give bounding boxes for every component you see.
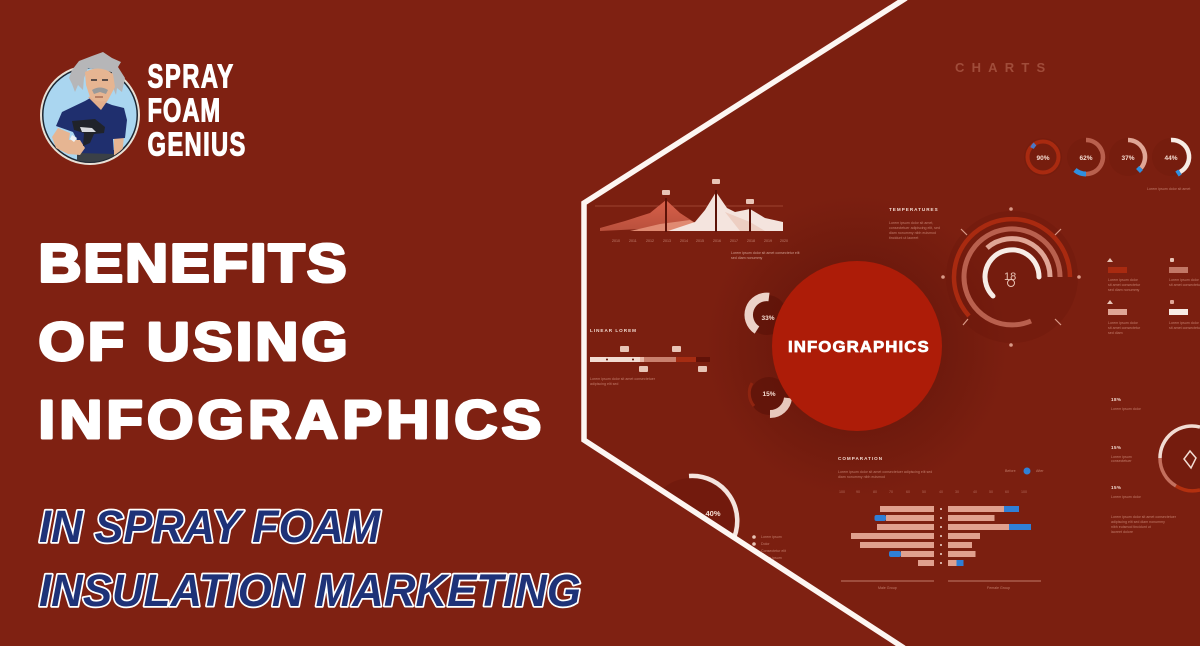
- chart: area peaks: 2016: [713, 239, 721, 243]
- text block: temperatures: tincidunt ut laoreet: [889, 236, 918, 240]
- chart: comparison bars: diam nonummy nibh euismod: [838, 475, 885, 479]
- chart: four percentage donuts: 44%: [1164, 155, 1178, 162]
- legend blocks: A B C D: Lorem ipsum dolor: [1108, 278, 1139, 282]
- chart: area peaks: sed diam nonummy: [731, 256, 763, 260]
- legend blocks: A B C D: Lorem ipsum dolor: [1169, 321, 1200, 325]
- chart: four percentage donuts: 90%: [1036, 155, 1050, 162]
- legend blocks: A B C D: Lorem ipsum dolor: [1169, 278, 1200, 282]
- chart: comparison bars: 80: [873, 490, 877, 494]
- panel: left background: [0, 0, 903, 646]
- chart: 40 percent donut: 40%: [705, 509, 721, 518]
- chart: area peaks: [595, 179, 800, 260]
- chart: comparison bars: 100: [1021, 490, 1027, 494]
- legend: 40 percent donut: Lorem ipsum: [761, 535, 782, 539]
- chart: area peaks: 2015: [696, 239, 704, 243]
- chart: comparison bars: 60: [1005, 490, 1009, 494]
- chart: area peaks: 2018: [747, 239, 755, 243]
- chart: four percentage donuts: Lorem ipsum dolor sit amet: [1147, 187, 1190, 191]
- stats: percentage list: laoreet dolore: [1111, 530, 1133, 534]
- frame: white hexagon outline: [584, 0, 906, 646]
- legend blocks: A B C D: [1107, 258, 1200, 335]
- heading: charts: CHARTS: [955, 60, 1052, 75]
- text block: temperatures: diam nonummy nibh euismod: [889, 231, 936, 235]
- chart: 15 percent donut: 15%: [762, 391, 776, 398]
- chart: 33 percent donut: [747, 295, 787, 335]
- title: benefits of using infographics: BENEFITS: [38, 234, 347, 294]
- text: logo wordmark: [148, 59, 245, 164]
- chart: comparison bars: 30: [955, 490, 959, 494]
- chart: comparison bars: 50: [989, 490, 993, 494]
- chart: comparison bars: 50: [922, 490, 926, 494]
- legend blocks: A B C D: sit amet consectetur: [1108, 326, 1141, 330]
- stats: percentage list: 15%: [1111, 485, 1121, 490]
- title: benefits of using infographics: INFOGRAPHICS: [38, 390, 541, 450]
- chart: radial temperature gauge: 18: [1004, 271, 1016, 283]
- chart: comparison bars: 70: [889, 490, 893, 494]
- legend blocks: A B C D: sed diam nonummy: [1108, 288, 1140, 292]
- chart: comparison bars: 90: [856, 490, 860, 494]
- legend blocks: A B C D: sed diam: [1108, 331, 1123, 335]
- logo: spray foam genius: [40, 52, 245, 170]
- chart: comparison bars: 100: [839, 490, 845, 494]
- text block: temperatures: consectetuer adipiscing elit, sed: [889, 226, 940, 230]
- chart: area peaks: 2017: [730, 239, 738, 243]
- subtitle: in spray foam insulation marketing: IN SPRAY FOAM: [39, 501, 381, 552]
- legend: 40 percent donut: Lorem: [761, 563, 771, 567]
- legend: 40 percent donut: Dolor: [761, 542, 770, 546]
- chart: area peaks: 2020: [780, 239, 788, 243]
- subtitle: in spray foam insulation marketing: [39, 501, 581, 616]
- chart: comparison bars: 40: [939, 490, 943, 494]
- chart: area peaks: 2012: [646, 239, 654, 243]
- chart: comparison bars: COMPARATION: [838, 456, 883, 461]
- title: benefits of using infographics: [38, 234, 541, 450]
- chart: comparison bars: Lorem ipsum dolor sit amet consectetuer adipiscing elit sed: [838, 470, 932, 474]
- legend: 40 percent donut: Consectetur elit: [761, 549, 786, 553]
- chart: area peaks: 2014: [680, 239, 688, 243]
- timeline: linear lorem: LINEAR LOREM: [590, 328, 637, 333]
- chart: comparison bars: After: [1036, 469, 1044, 473]
- chart: partial donut at right edge: [1160, 426, 1200, 491]
- legend: 40 percent donut: Lorem ipsum: [761, 556, 782, 560]
- chart: area peaks: 2013: [663, 239, 671, 243]
- text: logo wordmark: GENIUS: [148, 127, 245, 164]
- chart: comparison bars: 60: [906, 490, 910, 494]
- chart: comparison bars: Before: [1005, 469, 1016, 473]
- text block: temperatures: [889, 207, 940, 240]
- circle: central infographics badge: [772, 261, 942, 431]
- legend: 40 percent donut: [752, 535, 786, 567]
- timeline: linear lorem: adipiscing elit sed: [590, 382, 618, 386]
- stats: percentage list: [1111, 397, 1177, 534]
- legend blocks: A B C D: sit amet consectetur: [1108, 283, 1141, 287]
- stats: percentage list: adipiscing elit sed diam nonummy: [1111, 520, 1165, 524]
- subtitle: in spray foam insulation marketing: INSULATION MARKETING: [39, 565, 581, 616]
- chart: four percentage donuts: 62%: [1079, 155, 1093, 162]
- stats: percentage list: 18%: [1111, 397, 1121, 402]
- stats: percentage list: nibh euismod tincidunt ut: [1111, 525, 1151, 529]
- stats: percentage list: 15%: [1111, 445, 1121, 450]
- stats: percentage list: Lorem ipsum: [1111, 455, 1132, 459]
- stats: percentage list: consectetuer: [1111, 459, 1132, 463]
- stats: percentage list: Lorem ipsum dolor: [1111, 495, 1142, 499]
- timeline: linear lorem: Lorem ipsum dolor sit amet consectetuer: [590, 377, 656, 381]
- chart: four percentage donuts: [1024, 138, 1190, 191]
- title: benefits of using infographics: OF USING: [38, 312, 348, 372]
- chart: area peaks: 2019: [764, 239, 772, 243]
- chart: comparison bars: Male Group: [878, 586, 897, 590]
- chart: 15 percent donut: [749, 377, 788, 415]
- chart: comparison bars: 40: [973, 490, 977, 494]
- text block: temperatures: TEMPERATURES: [889, 207, 939, 212]
- text: logo wordmark: FOAM: [148, 93, 220, 130]
- text: logo wordmark: SPRAY: [148, 59, 233, 96]
- timeline: linear lorem: [590, 328, 710, 386]
- text block: temperatures: Lorem ipsum dolor sit amet,: [889, 221, 933, 225]
- chart: radial temperature gauge: [941, 207, 1081, 347]
- stats: percentage list: Lorem ipsum dolor: [1111, 407, 1142, 411]
- panel: right infographic preview: [590, 63, 1200, 590]
- legend blocks: A B C D: Lorem ipsum dolor: [1108, 321, 1139, 325]
- chart: four percentage donuts: 37%: [1121, 155, 1135, 162]
- chart: comparison bars: [838, 456, 1044, 590]
- chart: 40 percent donut: [648, 476, 786, 567]
- chart: area peaks: 2011: [629, 239, 637, 243]
- chart: area peaks: Lorem ipsum dolor sit amet consectetur elit: [731, 251, 800, 255]
- circle: central infographics badge: INFOGRAPHICS: [788, 338, 929, 356]
- chart: 33 percent donut: 33%: [761, 315, 775, 322]
- chart: area peaks: 2010: [612, 239, 620, 243]
- stats: percentage list: Lorem ipsum dolor sit amet consectetuer: [1111, 515, 1177, 519]
- icon: mascot badge: [40, 52, 140, 170]
- chart: comparison bars: Female Group: [987, 586, 1010, 590]
